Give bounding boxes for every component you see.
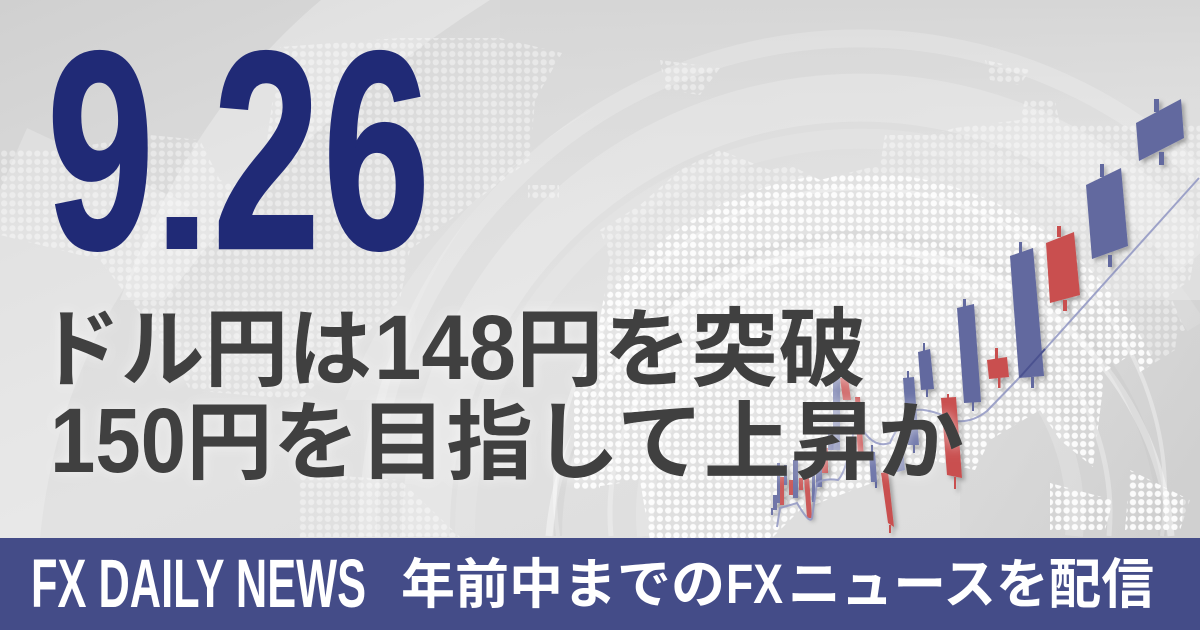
left swoosh bands bbox=[0, 0, 600, 538]
trend line overlay bbox=[1020, 349, 1045, 377]
headline: 150 bbox=[50, 390, 186, 492]
headline: 円を目指して上昇か bbox=[186, 395, 964, 491]
date heading: 6 bbox=[323, 0, 430, 308]
headline bbox=[37, 297, 964, 492]
mid candles bbox=[869, 371, 962, 533]
date heading bbox=[47, 0, 430, 308]
date heading: 2 bbox=[213, 0, 320, 308]
large candles bbox=[918, 99, 1184, 411]
candlestick chart bbox=[771, 99, 1199, 533]
concentric globe rings bbox=[368, 38, 1196, 536]
footer tagline: FX bbox=[726, 552, 783, 615]
headline: 148 bbox=[374, 297, 516, 399]
footer tagline bbox=[401, 552, 1154, 615]
date heading: . bbox=[152, 54, 212, 295]
trend line, lower section bbox=[777, 178, 1199, 527]
date heading: 9 bbox=[47, 0, 154, 308]
footer tagline: 年前中までの bbox=[401, 555, 725, 615]
headline: ドル円は bbox=[37, 302, 372, 398]
small distant candles bbox=[771, 377, 864, 518]
headline: 円を突破 bbox=[516, 302, 866, 398]
footer brand: FX DAILY NEWS bbox=[31, 545, 366, 622]
footer bar bbox=[0, 538, 1200, 630]
footer tagline: ニュースを配信 bbox=[788, 555, 1154, 615]
